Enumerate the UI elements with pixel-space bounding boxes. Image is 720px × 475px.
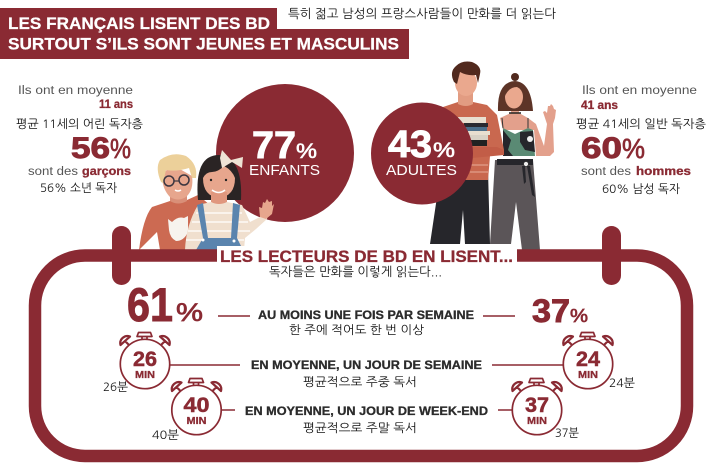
text block: adult stats: 평균 41세의 일반 독자층 [576,117,706,130]
stat row: at least once a week: 37 [532,293,570,329]
stat row: at least once a week: % [176,299,203,327]
icon: clock 26 min: MIN [135,369,155,381]
section heading: LES LECTEURS DE BD EN LISENT... [220,248,513,266]
stat row: at least once a week: % [570,306,588,326]
stat row: weekday [170,358,563,388]
text block: adult stats [576,85,706,195]
circle: 43% adultes: ADULTES [386,162,457,179]
icon: clock 24 min: MIN [578,369,598,381]
icon: clock 24 min: 24 [576,348,600,371]
stat row: weekend [221,404,512,434]
text block: adult stats: 41 ans [581,100,618,112]
icon: clock 26 min [120,332,170,389]
text block: children stats: sont des [28,166,78,178]
circle: 77% enfants [216,84,354,222]
illustration: adults with books [430,62,556,250]
stat row: at least once a week: AU MOINS UNE FOIS PAR SEMAINE [258,308,474,322]
text block: children stats: 56 [71,132,110,165]
clock captions in korean: 40분 [152,429,179,441]
panel: reading frame [35,226,687,456]
clock captions in korean [103,377,635,441]
title banner: SURTOUT S’ILS SONT JEUNES ET MASCULINS [8,34,399,54]
section heading [217,246,517,278]
clock captions in korean: 24분 [609,377,635,389]
text block: children stats: 평균 11세의 어린 독자층 [16,117,143,130]
icon: clock 37 min: MIN [527,415,547,427]
circle: 77% enfants: % [296,140,317,163]
circle: 43% adultes: 43 [388,124,432,166]
text block: adult stats: 60% 남성 독자 [602,183,680,195]
icon: clock 40 min: MIN [186,415,206,427]
circle: 77% enfants: ENFANTS [249,162,320,179]
text block: children stats: garçons [82,166,131,178]
stat row: weekday: 평균적으로 주중 독서 [303,376,417,388]
stat row: weekend: 평균적으로 주말 독서 [303,421,417,434]
text block: adult stats: 60 [581,132,622,165]
woman [490,160,540,250]
icon: clock 26 min: 26 [133,348,157,371]
icon: clock 37 min [512,378,562,435]
text block: children stats: Ils ont en moyenne [18,85,133,97]
text block: adult stats: Ils ont en moyenne [582,85,697,97]
text block: children stats: 56% 소년 독자 [40,182,117,194]
clock captions in korean: 26분 [103,381,128,393]
circle: 43% adultes [371,102,473,204]
section heading: 독자들은 만화를 이렇게 읽는다... [269,265,442,278]
icon: clock 24 min [563,332,613,389]
title banner: LES FRANÇAIS LISENT DES BD [8,14,270,33]
icon: clock 40 min [172,378,221,435]
text block: adult stats: hommes [636,166,691,178]
circle: 43% adultes: % [433,139,455,162]
illustration: children [139,150,274,250]
icon: clock 40 min: 40 [184,394,209,417]
man [430,170,490,244]
clock captions in korean: 37분 [555,427,579,439]
stat row: at least once a week: 61 [127,278,173,331]
korean title: 특히 젊고 남성의 프랑스사람들이 만화를 더 읽는다 [288,7,556,20]
boy [139,195,210,250]
girl [197,155,241,200]
icon: clock 37 min: 37 [525,394,549,417]
text block: adult stats: sont des [581,166,631,178]
text block: children stats [16,85,143,194]
circle: 77% enfants: 77 [252,125,296,167]
text block: children stats: 11 ans [99,99,133,111]
stat row: at least once a week [127,278,588,336]
title banner [0,8,409,59]
stat row: weekend: EN MOYENNE, UN JOUR DE WEEK-END [245,404,488,418]
text block: children stats: % [110,133,131,164]
stat row: weekday: EN MOYENNE, UN JOUR DE SEMAINE [251,358,482,372]
text block: adult stats: % [622,133,645,164]
stat row: at least once a week: 한 주에 적어도 한 번 이상 [289,324,424,336]
